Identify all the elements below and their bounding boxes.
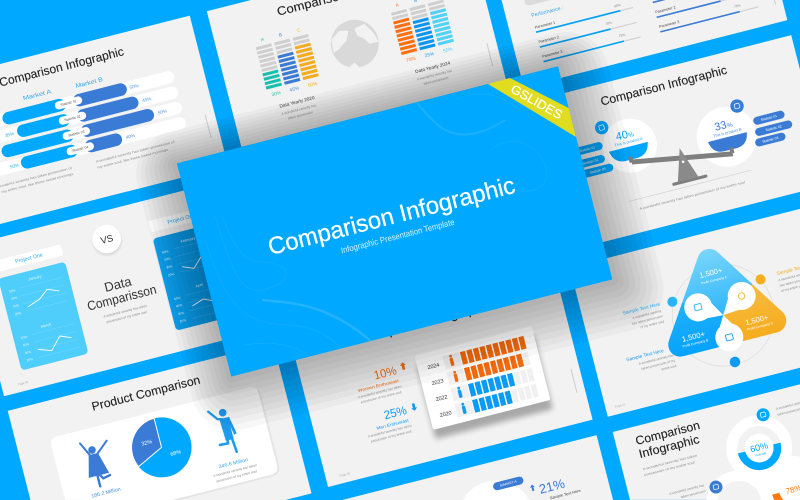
ribbon: GSLIDES: GSLIDES xyxy=(508,82,565,122)
chart: left product circle: This is product A xyxy=(614,136,643,148)
chart: data yearly 2020 xyxy=(257,26,319,98)
chart: 60 percent donut xyxy=(719,408,799,488)
chart: diverging market bars: Statistic 01 xyxy=(60,99,77,107)
chart: right product circle: This is product B xyxy=(713,126,742,138)
chart: right parameter bars: 75% xyxy=(734,3,741,9)
legend: right statistic pills xyxy=(749,109,796,147)
chart: dark blue line charts: 40% xyxy=(164,256,171,262)
chart: left parameter bars xyxy=(534,0,641,62)
chart: diverging market bars xyxy=(0,70,187,182)
chart: data yearly 2024: A xyxy=(395,2,399,8)
chart: data yearly 2024: 25% xyxy=(424,51,436,59)
chart: yearly waffle bars: 2020 xyxy=(439,410,452,419)
chart: dark blue line charts: 60% xyxy=(174,296,181,301)
chart: pie xyxy=(125,411,198,484)
legend: left statistic pills xyxy=(566,140,614,181)
chart: diverging market bars: 40% xyxy=(125,133,135,140)
chart: dark blue line charts xyxy=(153,222,243,331)
chart: left parameter bars: Parameter 1 xyxy=(534,21,556,30)
chart: 60 percent donut: Average xyxy=(755,451,767,457)
chart: dark blue line charts: 60% xyxy=(162,249,169,255)
label: page number: Page 15 xyxy=(615,402,626,409)
chart: rounded triangle xyxy=(668,248,786,357)
label: market B: Market B xyxy=(75,77,104,90)
panel: market comparison slide xyxy=(0,16,228,233)
chart: rounded triangle: 1,500+ xyxy=(681,329,706,344)
chart: yearly waffle bars: 2023 xyxy=(431,378,444,387)
label: project one tab xyxy=(0,244,63,272)
text block: cover subtitle: Infographic Presentation Template xyxy=(340,217,456,255)
icon: globe xyxy=(321,12,389,80)
text block: lower note: taken possession xyxy=(680,489,706,499)
text block: sample text one: A wonderful serenity xyxy=(632,309,662,320)
chart: diverging market bars: 45% xyxy=(142,96,152,103)
text block: sample text one: of my entire soul xyxy=(640,319,665,329)
shadow of the cover slide xyxy=(127,23,673,440)
chart: data yearly 2020: B xyxy=(278,32,282,38)
text block: right figure stat: possession of my entire soul xyxy=(216,469,258,483)
chart: left parameter bars: 80% xyxy=(614,3,621,8)
stat: 21 percent xyxy=(529,472,582,500)
text block: top note xyxy=(776,398,800,417)
chart: left product circle xyxy=(594,109,663,179)
label: market A: Market A xyxy=(23,89,52,102)
chart: yearly waffle bars: 2022 xyxy=(435,394,448,403)
text block: left note xyxy=(0,166,74,196)
chart: data yearly 2024: 70% xyxy=(406,56,417,64)
text block: data yearly 2020: Data Yearly 2020 xyxy=(279,95,316,109)
chart: data yearly 2020: 60% xyxy=(307,81,319,89)
stat: 21 percent: 21% xyxy=(537,476,567,497)
legend: right statistic pills: Statistic 02 xyxy=(765,124,782,132)
icon: top badge xyxy=(755,407,771,423)
text block: data comparison note: possession of my entire soul xyxy=(106,310,148,324)
icon: balance scale xyxy=(618,129,751,202)
chart: data yearly 2024: 55% xyxy=(443,46,454,55)
panel: performance slide xyxy=(486,0,787,87)
chart: yearly waffle bars: 2024 xyxy=(427,362,440,371)
text block: sample text two: Sample Text Here xyxy=(626,348,665,363)
heading: cover title: Comparison Infographic xyxy=(265,172,518,261)
chart: data yearly 2020: 45% xyxy=(289,85,300,94)
stat: women enthusiast: 10% xyxy=(372,363,398,383)
chart: rounded triangle: 1,500+ xyxy=(744,313,770,327)
legend: left statistic pills: Statistic 03 xyxy=(589,167,606,175)
panel: market A slide xyxy=(342,435,613,500)
legend: left statistic pills: Statistic 01 xyxy=(579,145,596,153)
chart: diverging market bars: 50% xyxy=(129,83,139,90)
chart: left parameter bars: 75% xyxy=(618,33,626,38)
text block: donut note: possession of my entire soul xyxy=(644,460,695,477)
panel: product card xyxy=(49,386,279,500)
chart: left parameter bars: Parameter 3 xyxy=(542,50,563,59)
heading: donut slide title: Comparison xyxy=(634,418,701,448)
text block: right figure stat: A wonderful serenity has taken xyxy=(213,463,258,478)
panel: donut slide xyxy=(613,365,800,500)
text block: right note: my entire soul, like these sweet mornings xyxy=(97,148,169,170)
text block: data yearly 2024: A wonderful serenity has xyxy=(417,69,453,81)
chart: light blue line charts: January xyxy=(28,274,42,282)
icon: man figure xyxy=(208,406,241,456)
chart: right product circle: 33% xyxy=(713,118,734,134)
icon: lower badge xyxy=(708,479,724,495)
label: project two tab xyxy=(148,204,218,232)
chart: rounded triangle: 1,500+ xyxy=(698,265,724,280)
text block: sample text two: entire soul xyxy=(661,364,677,371)
text block: sample text one: has taken possession xyxy=(631,314,663,326)
text block: sample text two: taken possession of my xyxy=(641,358,676,371)
chart: light blue line charts: March xyxy=(40,322,52,329)
label: page number: Page 05 xyxy=(18,380,29,386)
stat: men enthusiast xyxy=(362,400,423,444)
text block: donut note: A wonderful serenity has taken xyxy=(642,453,698,471)
panel: enthusiast slide xyxy=(290,270,593,487)
chart: pie: 32% xyxy=(141,439,153,448)
chart: dark blue line charts: April xyxy=(195,283,204,289)
chart: rounded triangle: Profit Company C xyxy=(747,321,774,332)
chart: light blue line charts: 40% xyxy=(11,295,18,301)
chart: right parameter bars xyxy=(651,0,758,33)
chart: dark blue line charts: 40% xyxy=(175,303,183,308)
legend: left statistic pills: Statistic 02 xyxy=(582,158,599,166)
chart: light blue line charts: 30% xyxy=(12,303,20,309)
stat: men enthusiast: 25% xyxy=(382,403,408,422)
icon: left badge xyxy=(666,296,678,308)
chart: left product circle: 40% xyxy=(615,127,635,143)
chart: pie: 68% xyxy=(170,449,182,458)
heading: enthusiast slide title: Comparison Infographic xyxy=(362,299,491,345)
legend: right statistic pills: Statistic 01 xyxy=(760,114,778,122)
text block: data comparison note xyxy=(103,304,149,325)
text block: right figure stat xyxy=(211,455,259,484)
stat: men enthusiast: Men Enthusiast xyxy=(376,417,410,431)
label: project one tab: Project One xyxy=(15,252,44,265)
text block: data comparison note: A wonderful serenity has taken xyxy=(103,304,148,319)
ribbon: GSLIDES xyxy=(488,78,576,137)
heading: scale slide title: Comparison Infographic xyxy=(599,63,728,109)
chart: light blue line charts: 20% xyxy=(14,311,22,316)
text block: data yearly 2024: taken possession xyxy=(423,76,449,86)
panel: yearly data slide xyxy=(207,0,506,147)
icon: bottom badge xyxy=(729,356,741,368)
chart: dark blue line charts: 30% xyxy=(166,264,173,270)
chart: data yearly 2024 xyxy=(392,0,454,64)
text block: sample text one xyxy=(622,301,665,333)
text block: right note xyxy=(95,140,176,170)
chart: diverging market bars: 50% xyxy=(9,162,20,170)
chart: diverging market bars: Statistic 04 xyxy=(72,145,89,153)
text block: data yearly 2020: A wonderful serenity has xyxy=(281,103,317,116)
chart: dark blue line charts: 20% xyxy=(179,318,187,323)
label: performance heading: Performance : xyxy=(531,5,564,19)
stat: men enthusiast: A wonderful serenity has taken xyxy=(368,424,412,439)
text block: sample text two xyxy=(626,346,677,379)
label: market A pill xyxy=(492,476,524,491)
legend: right statistic pills: Statistic 03 xyxy=(762,136,779,144)
chart: left parameter bars: 70% xyxy=(605,21,612,26)
text block: sample text two: A wonderful serenity has xyxy=(638,353,674,366)
stat: women enthusiast: A wonderful serenity has taken xyxy=(358,384,402,399)
heading: donut slide title: Infographic xyxy=(637,432,701,461)
panel: data comparison slide xyxy=(0,178,270,396)
text block: lower note: A wonderful serenity has xyxy=(669,483,705,496)
text block: left note: my entire soul, like these sweet mornings xyxy=(1,172,74,194)
text block: right note: A wonderful serenity has taken possession of xyxy=(95,140,175,164)
stat: women enthusiast: Women Enthusiast xyxy=(357,378,400,393)
cover contour decoration xyxy=(205,94,547,365)
text block: sample text three xyxy=(776,262,800,293)
chart: right parameter bars: Parameter 2 xyxy=(655,5,676,14)
chart: light blue line charts: 50% xyxy=(9,288,16,294)
panel: triangle profit slide xyxy=(575,208,800,417)
text block: data yearly 2024 xyxy=(415,60,455,87)
text block: left figure stat: 186.2 Million xyxy=(91,486,122,500)
chart: data yearly 2020: A xyxy=(260,37,265,42)
stat: women enthusiast: possession of my entire soul xyxy=(361,390,402,404)
text block: data yearly 2020: taken possession xyxy=(288,110,313,120)
icon: right badge xyxy=(754,273,767,285)
text block: right figure stat: 346.6 Million xyxy=(218,457,249,470)
chart: market circle xyxy=(460,473,529,500)
heading: data comparison: Comparisson xyxy=(86,282,158,314)
icon: woman figure xyxy=(80,437,117,489)
chart: diverging market bars: Statistic 03 xyxy=(68,130,85,138)
stat: women enthusiast xyxy=(352,361,413,405)
chart: light blue line charts: 40% xyxy=(22,342,30,347)
chart: rounded triangle: Profit Company B xyxy=(682,338,709,349)
label: page number: Page 20 xyxy=(339,471,351,478)
chart: dark blue line charts: 30% xyxy=(177,311,185,316)
chart: data yearly 2020: 30% xyxy=(271,90,283,98)
chart: right product circle xyxy=(689,96,763,173)
heading: data comparison xyxy=(82,268,158,314)
icon: VS badge xyxy=(89,222,125,258)
chart: yearly waffle bars xyxy=(414,326,550,430)
stat: men enthusiast: possession of my entire soul xyxy=(371,429,412,443)
chart: 60 percent donut: 60% xyxy=(749,440,769,454)
chart: light blue line charts: 20% xyxy=(26,357,34,363)
chart: light blue line charts: 50% xyxy=(21,335,28,340)
heading: data comparison: Data xyxy=(103,273,134,295)
panel: cover slide xyxy=(177,66,612,377)
chart: dark blue line charts: February xyxy=(180,236,196,244)
chart: data yearly 2020: C xyxy=(297,27,301,33)
text block: donut note xyxy=(642,453,699,477)
chart: lower donuts xyxy=(701,449,800,500)
text block: scale note: A wonderful serenity has taken possession of my entire soul xyxy=(639,180,746,211)
text block: data yearly 2020 xyxy=(279,95,319,122)
chart: light blue line charts: 30% xyxy=(24,350,32,355)
chart: left parameter bars: Parameter 2 xyxy=(538,35,559,44)
heading: market slide title: Comparison Infographic xyxy=(0,44,125,89)
chart: diverging market bars: 50% xyxy=(157,108,167,116)
text block: data yearly 2024: Data Yearly 2024 xyxy=(415,60,451,74)
chart: diverging market bars: Statistic 02 xyxy=(64,114,81,122)
heading: product comparison: Product Comparison xyxy=(90,373,202,414)
chart: right parameter bars: Parameter 3 xyxy=(659,20,680,29)
heading: donut slide title xyxy=(634,418,705,461)
label: market A pill: MARKET A xyxy=(500,479,518,488)
chart: rounded triangle: Profit Company A xyxy=(701,275,728,286)
chart: dark blue line charts: 20% xyxy=(168,272,175,277)
chart: light blue line charts xyxy=(0,262,88,371)
icon: VS badge: VS xyxy=(99,233,115,247)
text block: sample text one: Sample Text Here xyxy=(622,301,661,317)
label: project two tab: Project One xyxy=(167,213,196,226)
panel: scale comparison slide xyxy=(528,35,800,252)
panel: product comparison slide xyxy=(8,343,312,500)
chart: diverging market bars: 35% xyxy=(4,131,15,138)
